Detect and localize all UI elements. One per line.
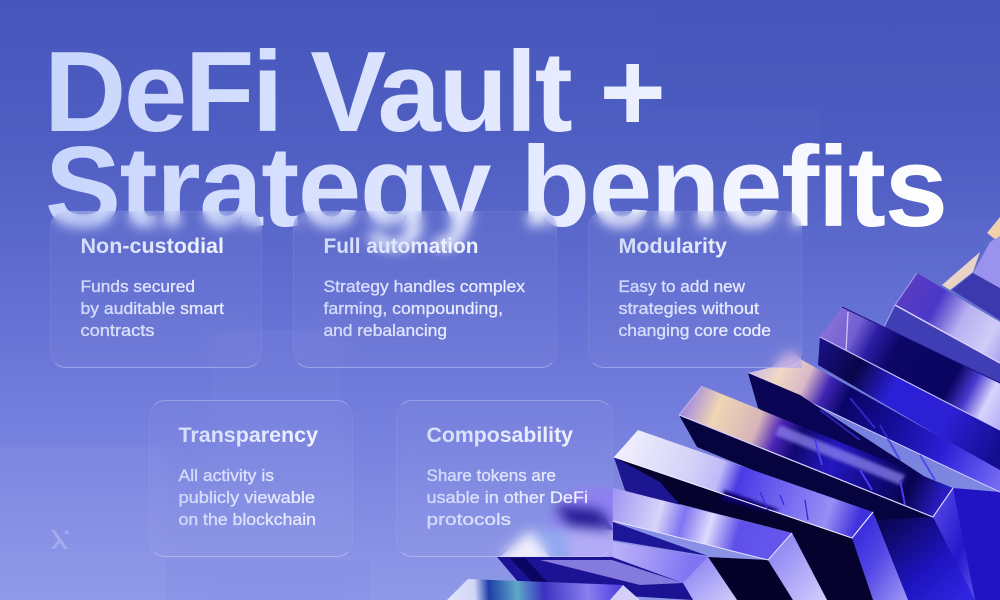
bar: lower violet <box>613 488 827 600</box>
bar: lowest lilac <box>447 538 737 600</box>
card: Non-custodial: contracts <box>80 321 154 340</box>
bar: under card blur <box>500 488 613 557</box>
icon: logo <box>51 530 68 549</box>
card: Non-custodial: Funds secured <box>80 277 195 296</box>
card: Composability: protocols <box>426 510 511 529</box>
card: Composability: Share tokens are <box>426 466 556 485</box>
card: Transparency <box>149 400 353 557</box>
card: Composability <box>396 400 613 557</box>
card: Full automation: farming, compounding, <box>324 299 503 318</box>
card: Full automation: and rebalancing <box>324 321 447 340</box>
card: Modularity <box>588 211 802 368</box>
card: Transparency: publicly viewable <box>178 488 315 507</box>
card: Composability: Composability <box>426 424 573 447</box>
card: Non-custodial: by auditable smart <box>80 299 224 318</box>
card: Full automation <box>293 211 557 368</box>
bar: top right peach <box>942 217 1000 320</box>
card: Full automation: Full automation <box>324 235 478 258</box>
card: Full automation: Strategy handles complex <box>324 277 526 296</box>
title: DeFi Vault + <box>44 29 666 156</box>
bar: bright lower <box>614 430 908 600</box>
card: Composability: usable in other DeFi <box>426 488 588 507</box>
card: Modularity: Easy to add new <box>618 277 746 296</box>
card: Transparency: All activity is <box>178 466 274 485</box>
card: Transparency: on the blockchain <box>178 510 316 529</box>
card: Modularity: changing core code <box>618 321 771 340</box>
title: Strategy benefits <box>45 124 948 251</box>
card: Modularity: Modularity <box>618 235 727 258</box>
bar: long middle <box>748 350 1000 600</box>
bar: center with amber tip <box>679 386 975 600</box>
card: Transparency: Transparency <box>178 424 318 447</box>
card: Modularity: strategies without <box>618 299 759 318</box>
card: Non-custodial: Non-custodial <box>80 235 224 258</box>
bar: upper right <box>884 273 1000 390</box>
bar: right second <box>818 307 1000 472</box>
card: Non-custodial <box>50 211 262 368</box>
